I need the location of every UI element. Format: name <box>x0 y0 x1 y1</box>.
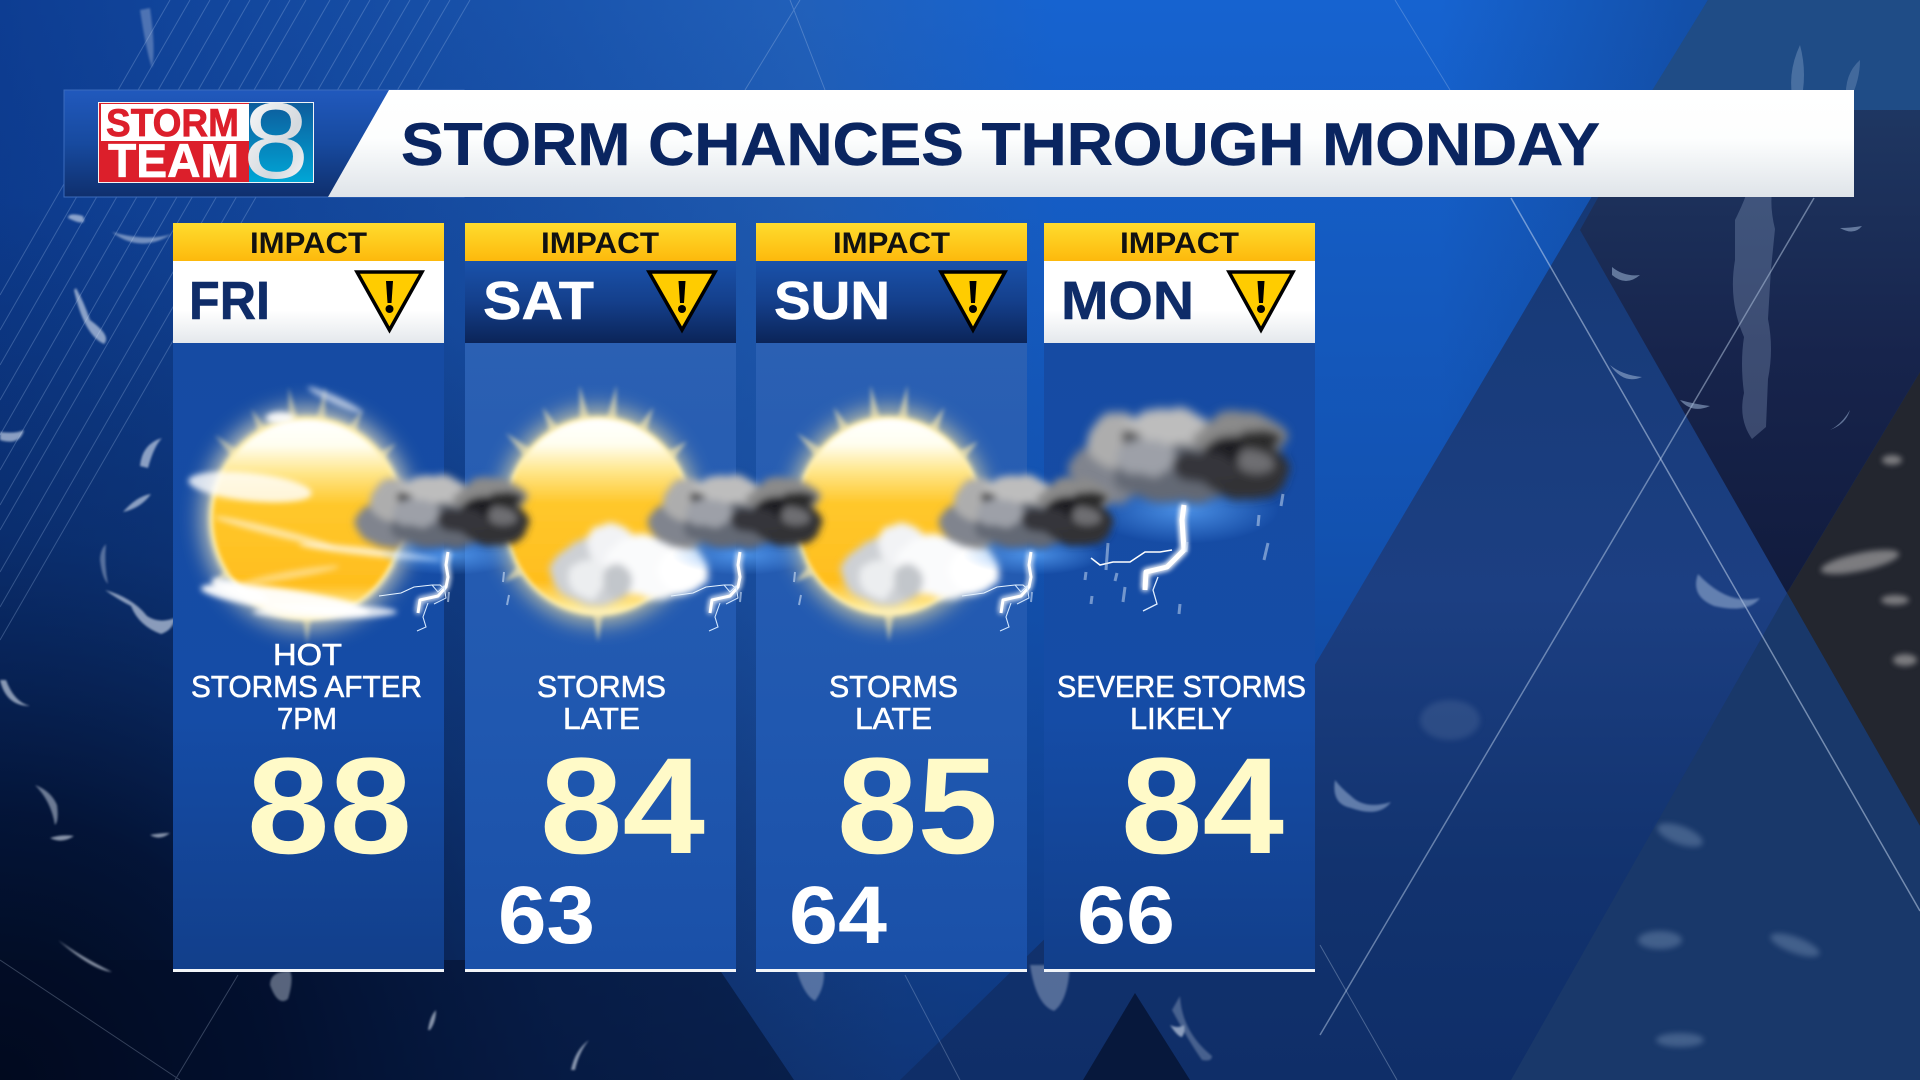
icon: warning triangle <box>1229 272 1293 330</box>
day header <box>1044 261 1315 343</box>
impact label <box>756 223 1027 261</box>
day header: SAT <box>483 271 594 331</box>
forecast text: Sunday: STORMS <box>829 669 958 704</box>
high temperature: Sunday 85: 85 <box>837 730 998 883</box>
header banner <box>64 80 1854 201</box>
high temperature: Monday 84: 84 <box>1121 730 1284 883</box>
panel: Saturday <box>465 223 736 972</box>
title bar <box>328 90 1854 197</box>
forecast text: Monday: SEVERE STORMS <box>1057 669 1306 704</box>
icon: warning triangle <box>941 272 1005 330</box>
day header: MON <box>1061 271 1194 331</box>
impact label: IMPACT <box>1120 227 1239 260</box>
impact label <box>1044 223 1315 261</box>
icon: Sunday sun, cloud and storm <box>789 385 1113 642</box>
forecast text: Monday <box>1057 669 1306 736</box>
high temperature: Friday 88: 88 <box>247 730 412 883</box>
day header <box>756 261 1027 343</box>
logo: Storm Team 8: STORM <box>106 102 239 145</box>
forecast text: Saturday: STORMS <box>537 669 666 704</box>
low temperature: Sunday 64: 64 <box>789 870 887 961</box>
low temperature: Monday 66: 66 <box>1077 870 1175 961</box>
forecast text: Friday: STORMS AFTER <box>191 669 422 704</box>
icon: Monday severe storm <box>1068 408 1289 614</box>
icon: Saturday sun, cloud and storm <box>498 385 822 642</box>
forecast text: Saturday: LATE <box>563 701 640 736</box>
impact label: IMPACT <box>833 227 950 260</box>
forecast text: Friday: 7PM <box>277 701 337 736</box>
logo bar <box>64 90 464 197</box>
logo: Storm Team 8 <box>98 80 314 201</box>
panel: Sunday <box>756 223 1027 972</box>
icon: warning triangle <box>357 272 422 330</box>
icon: Friday hot sun with storm <box>187 384 529 644</box>
forecast text: Saturday <box>537 669 666 736</box>
forecast text: Friday <box>191 637 422 736</box>
impact label: IMPACT <box>250 227 367 260</box>
forecast text: Friday: HOT <box>273 637 342 672</box>
low temperature: Saturday 63: 63 <box>498 870 595 961</box>
impact label <box>173 223 444 261</box>
day header: SUN <box>774 271 890 331</box>
title: STORM CHANCES THROUGH MONDAY <box>401 111 1600 178</box>
day header <box>465 261 736 343</box>
day header <box>173 261 444 343</box>
panel: Monday <box>1044 223 1315 972</box>
high temperature: Saturday 84: 84 <box>540 730 705 883</box>
impact label: IMPACT <box>541 227 659 260</box>
icon: warning triangle <box>649 272 715 330</box>
forecast text: Sunday <box>829 669 958 736</box>
day header: FRI <box>189 271 270 331</box>
forecast text: Sunday: LATE <box>855 701 932 736</box>
forecast text: Monday: LIKELY <box>1130 701 1232 736</box>
rain drops on glass <box>0 8 1212 1070</box>
impact label <box>465 223 736 261</box>
logo: Storm Team 8: 8 <box>243 80 309 201</box>
logo: Storm Team 8: TEAM <box>108 134 239 187</box>
panel: Friday <box>173 223 444 972</box>
